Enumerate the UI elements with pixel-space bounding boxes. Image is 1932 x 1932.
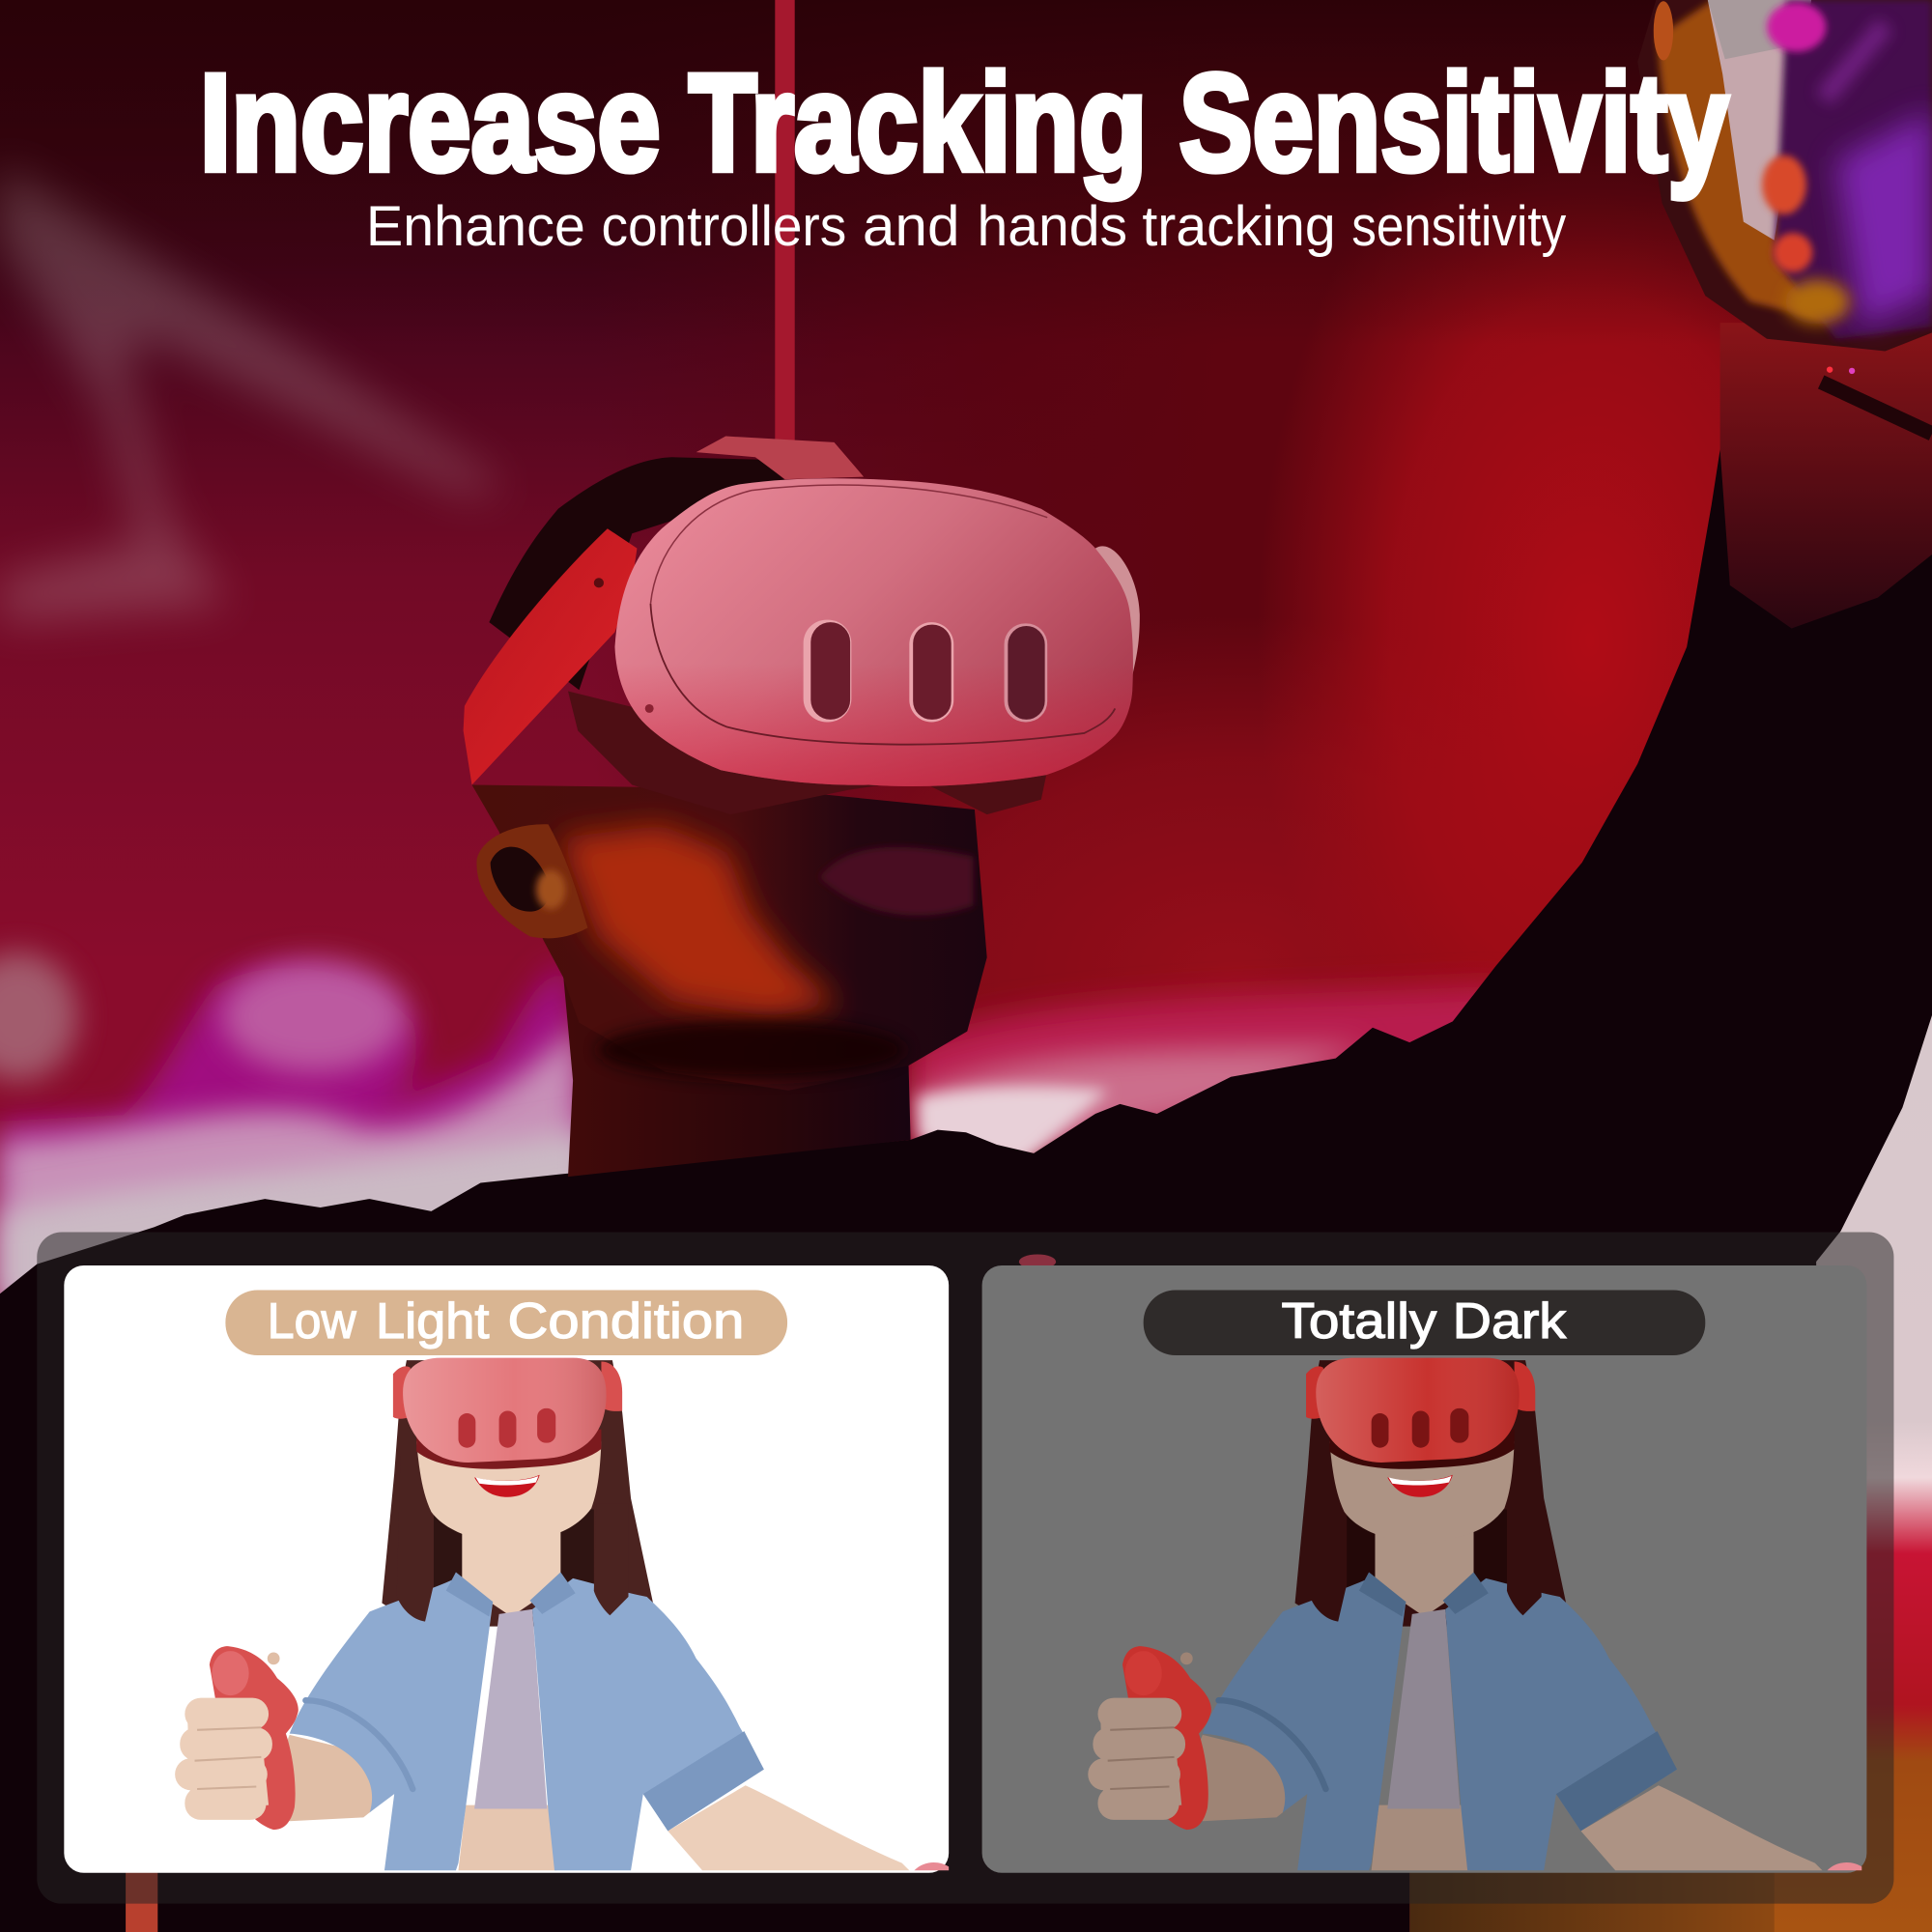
rear dial (1095, 546, 1140, 690)
left forearm (273, 1735, 394, 1821)
person silhouette: torso and raised arm (0, 419, 1932, 1932)
VR headset (464, 437, 1140, 814)
undershirt (474, 1609, 547, 1808)
neck (563, 974, 911, 1177)
face (416, 1441, 601, 1544)
chin shadow (598, 1020, 906, 1079)
forearm (1720, 323, 1932, 629)
VR headset (393, 1358, 622, 1469)
lips (819, 847, 974, 916)
title: Increase (200, 46, 661, 200)
mouth (474, 1475, 540, 1497)
collars (446, 1573, 493, 1616)
neck (462, 1528, 560, 1616)
front shell (614, 478, 1133, 786)
raised hand with controller (1637, 0, 1932, 434)
illustration: girl with headset, low light (175, 1358, 949, 1870)
label pill: low light: Condition (508, 1293, 744, 1350)
label pill: totally dark (1144, 1290, 1705, 1355)
midriff (458, 1805, 557, 1870)
illustration: girl with headset, totally dark (1088, 1358, 1861, 1870)
subtitle: and (863, 195, 960, 258)
label pill: low light: Light (376, 1293, 490, 1350)
ear (476, 824, 587, 938)
title: Tracking (689, 46, 1148, 200)
lit cheek (560, 826, 838, 1016)
back hair (382, 1360, 653, 1627)
strip of red visible on panel (1019, 1254, 1056, 1269)
fist (175, 1698, 272, 1820)
subtitle: tracking (1142, 195, 1336, 258)
subtitle (366, 195, 1567, 258)
jacket (290, 1578, 764, 1870)
panel backing (37, 1233, 1893, 1904)
label pill: low light: Low (268, 1293, 356, 1350)
red knit strap below panel (126, 1866, 157, 1932)
comparison panel (37, 1233, 1893, 1904)
subtitle: hands (977, 195, 1127, 258)
face (472, 784, 987, 1091)
subtitle: controllers (601, 195, 846, 258)
facial interface (568, 692, 1047, 814)
subtitle: Enhance (366, 195, 585, 258)
man: head and neck (472, 784, 987, 1177)
label pill: totally dark: Dark (1453, 1293, 1567, 1350)
title (200, 46, 1729, 200)
subtitle: sensitivity (1351, 195, 1567, 258)
red side strap (464, 528, 637, 784)
right arm (668, 1785, 909, 1870)
controller (210, 1646, 298, 1830)
tracking sensor slots (804, 620, 1047, 722)
back of head (489, 457, 788, 690)
label pill: totally dark: Totally (1282, 1293, 1437, 1350)
hanging red cable (775, 0, 795, 441)
label pill: low light (225, 1290, 787, 1355)
top strap (696, 437, 864, 479)
front hair strands (397, 1454, 434, 1622)
title: Sensitivity (1179, 46, 1729, 200)
card: totally dark (982, 1265, 1866, 1873)
card: low light (64, 1265, 949, 1873)
